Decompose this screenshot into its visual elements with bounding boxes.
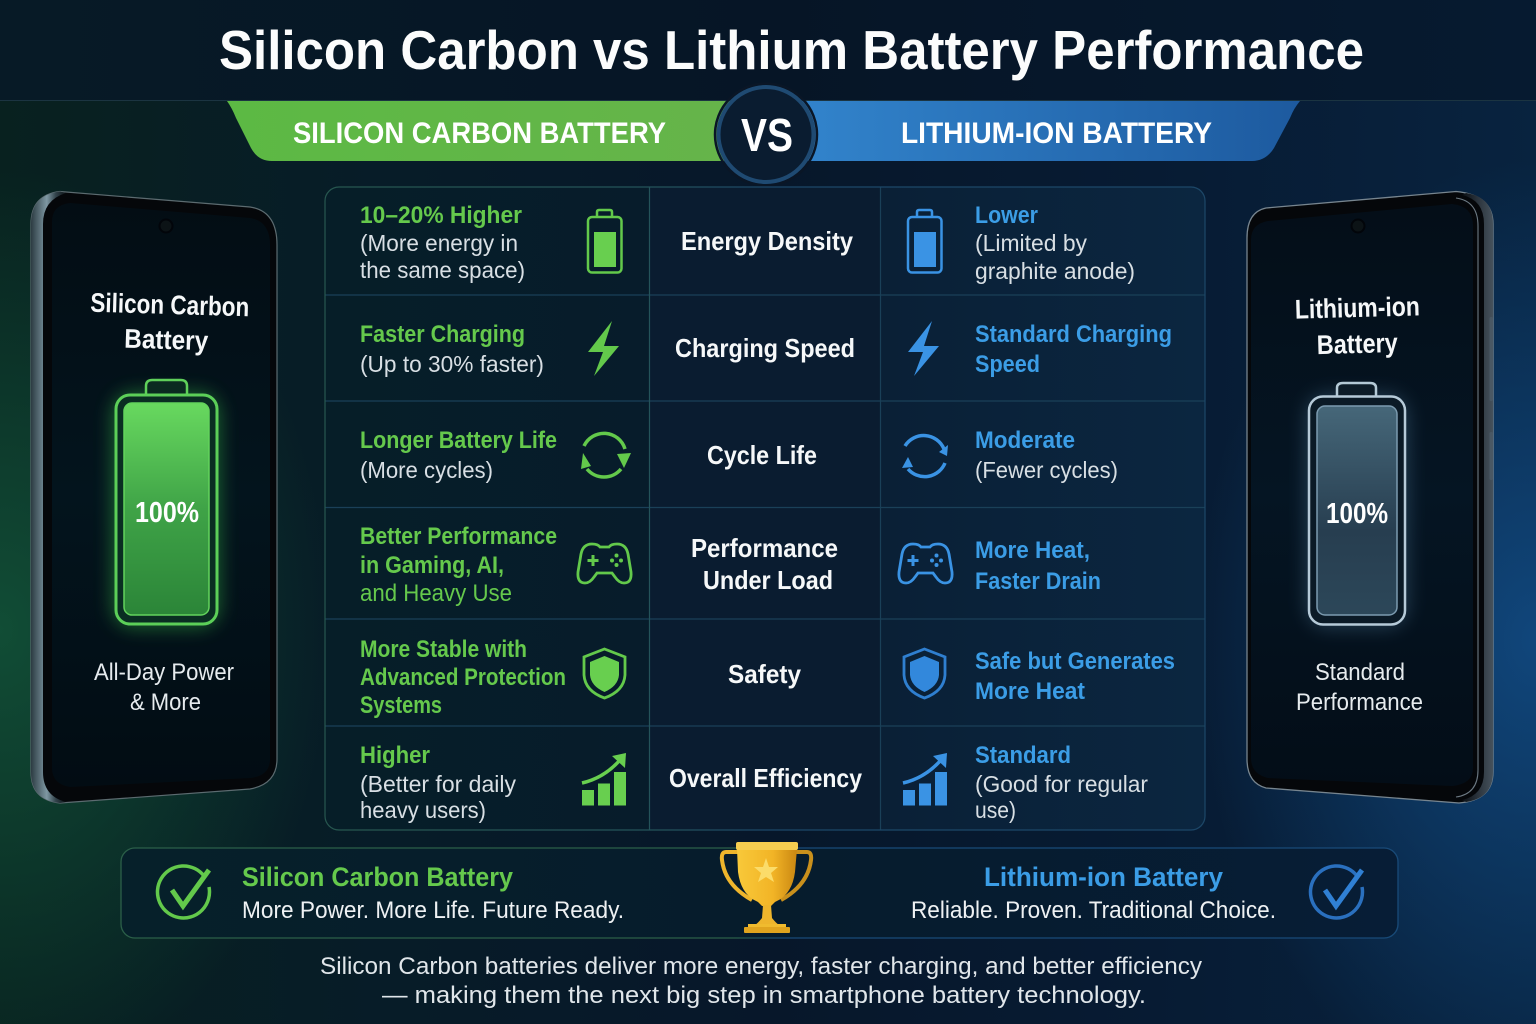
phone caption: & More (130, 689, 201, 716)
silicon value (360, 742, 516, 823)
row: cycle life (360, 427, 1118, 483)
footer summary (320, 953, 1202, 1009)
inner frame highlight (1456, 198, 1478, 797)
silicon value: (Up to 30% faster) (360, 351, 544, 377)
phone title: Battery (124, 324, 209, 356)
camera (160, 220, 172, 232)
metric label: Cycle Life (707, 440, 817, 470)
silicon value (360, 523, 557, 607)
battery percentage: 100% (135, 497, 199, 529)
phone title: Battery (1316, 328, 1398, 360)
icon: green shield (584, 649, 625, 698)
silicon value: (Better for daily (360, 771, 516, 797)
lithium verdict: Lithium-ion Battery (984, 862, 1223, 892)
lithium value (975, 427, 1118, 483)
phone title (89, 288, 250, 357)
icon: blue battery (908, 210, 942, 272)
phone body (31, 192, 277, 803)
verdict bar (121, 842, 1398, 938)
metric label: Performance (691, 533, 838, 563)
banner: lithium-ion (795, 101, 1300, 161)
lithium value (975, 537, 1101, 595)
lithium value: graphite anode) (975, 258, 1135, 284)
side buttons (1490, 317, 1493, 480)
phone caption: Performance (1296, 689, 1423, 716)
table backgrounds (325, 187, 1205, 830)
silicon verdict (242, 862, 624, 924)
lithium value: use) (975, 797, 1016, 823)
phone metallic edge (1462, 193, 1493, 802)
title: Silicon Carbon vs Lithium Battery Performance (219, 19, 1364, 81)
metric label: Overall Efficiency (669, 763, 862, 793)
silicon value: and Heavy Use (360, 580, 512, 607)
lithium value: (Fewer cycles) (975, 457, 1118, 483)
metric label: Under Load (703, 565, 833, 595)
silicon value (360, 427, 557, 483)
metric label (691, 533, 838, 595)
row: safety (360, 636, 1175, 719)
battery percentage: 100% (1326, 498, 1388, 530)
icon: trophy (722, 842, 811, 933)
silicon value: (More cycles) (360, 457, 493, 483)
silicon value (360, 321, 544, 377)
icon: green battery (588, 210, 622, 272)
header band (0, 0, 1536, 101)
lithium value (975, 648, 1175, 705)
camera (1352, 220, 1364, 232)
phone title: Lithium-ion (1294, 291, 1420, 325)
metric label: Charging Speed (675, 333, 855, 363)
lithium value: Standard (975, 742, 1071, 769)
footer summary: — making them the next big step in smartphone battery technology. (382, 982, 1146, 1009)
row: performance under load (360, 523, 1101, 607)
row: overall efficiency (360, 742, 1148, 823)
row: charging speed (360, 321, 1172, 378)
banner label: silicon carbon: SILICON CARBON BATTERY (293, 117, 666, 150)
lithium value (975, 321, 1172, 378)
lithium value (975, 742, 1148, 823)
phone caption: All-Day Power (94, 659, 234, 686)
icon: green chart (582, 753, 626, 806)
silicon verdict: Silicon Carbon Battery (242, 862, 513, 892)
silicon value (360, 636, 566, 719)
silicon verdict: More Power. More Life. Future Ready. (242, 897, 624, 924)
phone: lithium-ion (1247, 192, 1493, 803)
battery icon (1309, 383, 1405, 624)
phone: silicon carbon (31, 192, 277, 803)
silicon value: Systems (360, 692, 442, 719)
icon: green check (157, 866, 209, 918)
silicon value: (More energy in (360, 230, 518, 256)
verdict background (121, 848, 1398, 938)
lithium value: Faster Drain (975, 568, 1101, 595)
VS label: VS (741, 109, 793, 161)
icon: green bolt (588, 321, 619, 376)
icon: blue shield (904, 649, 945, 698)
phone caption (1296, 659, 1423, 716)
icon: blue gamepad (899, 544, 952, 583)
comparison table (325, 187, 1205, 830)
silicon value: Better Performance (360, 523, 557, 550)
lithium verdict: Reliable. Proven. Traditional Choice. (911, 897, 1276, 924)
lithium value: Speed (975, 351, 1040, 378)
icon: blue chart (903, 753, 947, 806)
icon: green gamepad (578, 544, 631, 583)
phone screen (1251, 204, 1473, 786)
silicon value: 10–20% Higher (360, 202, 522, 229)
phone title: Silicon Carbon (90, 288, 250, 322)
silicon value: in Gaming, AI, (360, 552, 504, 579)
phone metallic edge (31, 192, 66, 803)
phone caption (94, 659, 234, 716)
icon: green cycle (581, 433, 631, 477)
banner label: lithium-ion: LITHIUM-ION BATTERY (901, 117, 1212, 150)
silicon value: the same space) (360, 257, 525, 283)
phone title (1294, 291, 1421, 361)
VS badge (715, 84, 817, 186)
lithium verdict (911, 862, 1276, 924)
footer summary: Silicon Carbon batteries deliver more energy, faster charging, and better efficiency (320, 953, 1202, 980)
lithium value: Lower (975, 202, 1038, 229)
metric label: Energy Density (681, 226, 853, 256)
phone body (1247, 192, 1493, 803)
lithium value: (Limited by (975, 230, 1087, 256)
phone screen (52, 203, 270, 787)
battery icon (116, 380, 217, 624)
icon: blue cycle (902, 436, 948, 477)
metric label: Safety (728, 659, 801, 689)
silicon value: heavy users) (360, 797, 486, 823)
lithium value (975, 202, 1135, 284)
lithium value: Standard Charging (975, 321, 1172, 348)
silicon value: Faster Charging (360, 321, 525, 348)
silicon value (360, 202, 525, 283)
silicon value: Higher (360, 742, 430, 769)
battery glow (1306, 394, 1408, 628)
silicon value: Advanced Protection (360, 664, 566, 691)
icon: blue bolt (908, 321, 939, 376)
lithium value: More Heat (975, 678, 1085, 705)
lithium value: (Good for regular (975, 771, 1148, 797)
silicon value: Longer Battery Life (360, 427, 557, 454)
banner: silicon carbon (227, 101, 740, 161)
battery glow (112, 392, 220, 628)
lithium value: Moderate (975, 427, 1075, 454)
icon: blue check (1310, 866, 1362, 918)
lithium value: More Heat, (975, 537, 1090, 564)
silicon value: More Stable with (360, 636, 527, 663)
phone caption: Standard (1315, 659, 1405, 686)
row: energy density (360, 202, 1135, 284)
lithium value: Safe but Generates (975, 648, 1175, 675)
